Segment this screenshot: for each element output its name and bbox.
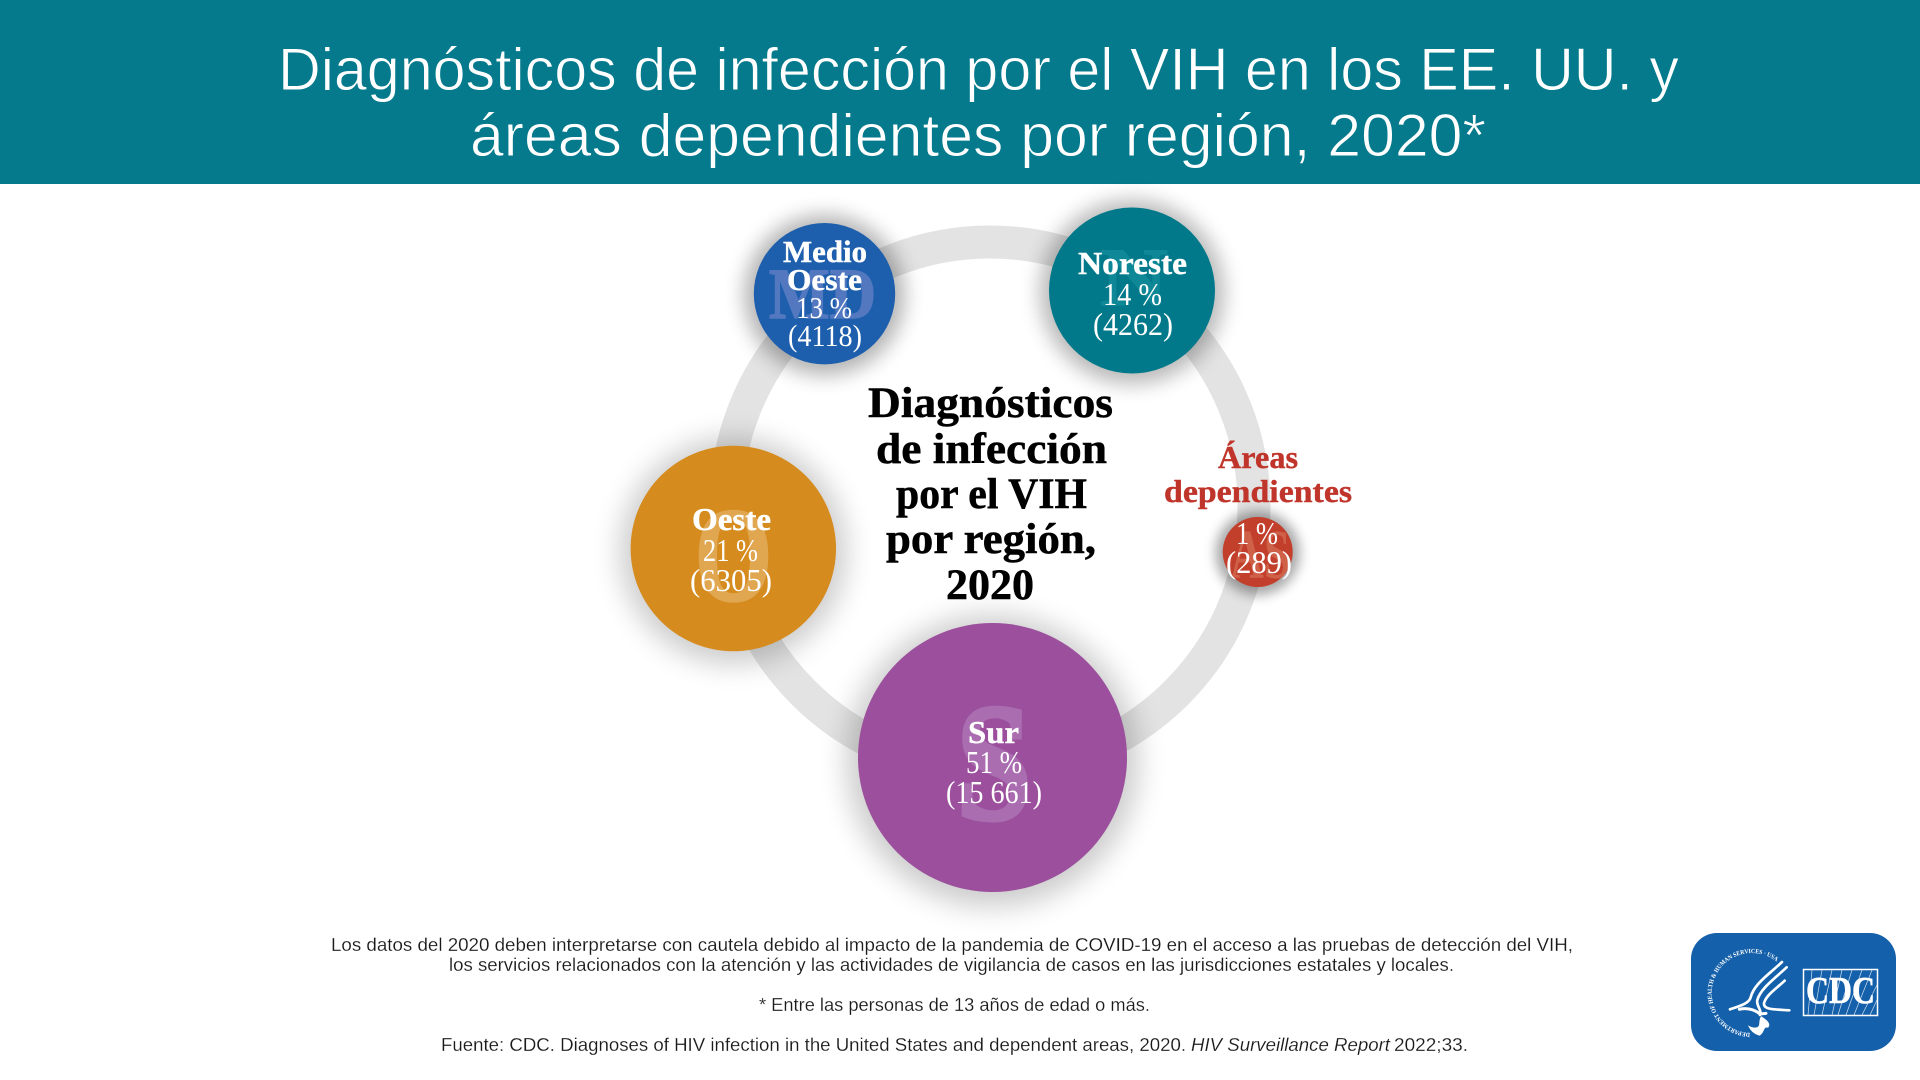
label Medio Oeste: 13 %: [796, 290, 852, 325]
footnotes: Los datos del 2020 deben interpretarse con cautela debido al impacto de la pandemia de COVID-19 en el acceso a las pruebas de detección del VIH,: [331, 935, 1573, 955]
label Oeste: [690, 501, 772, 598]
footnotes: [331, 935, 1573, 1055]
center heading: por región,: [886, 516, 1096, 563]
region: Sur: [846, 615, 1138, 907]
value 1 % (289): [1226, 515, 1292, 580]
ghost letter S: S: [956, 670, 1032, 856]
title: [278, 36, 1679, 169]
footnotes: Fuente: CDC. Diagnoses of HIV infection in the United States and dependent areas, 2020.: [441, 1035, 1186, 1055]
ghost letter O: O: [695, 481, 772, 629]
label Medio Oeste: Oeste: [787, 262, 862, 297]
label Oeste: Oeste: [692, 501, 771, 537]
center heading: de infección: [876, 426, 1107, 473]
label Noreste: Noreste: [1078, 245, 1187, 281]
label Sur: [946, 714, 1042, 810]
label Noreste: (4262): [1093, 306, 1173, 342]
value 1 % (289): (289): [1226, 544, 1292, 580]
region: Noreste: [1040, 200, 1224, 384]
CDC box: CDC: [1806, 970, 1875, 1012]
label Sur: Sur: [968, 714, 1019, 750]
footnotes: los servicios relacionados con la atención y las actividades de vigilancia de casos en las jurisdicciones estatales y locales.: [449, 955, 1454, 975]
ghost letters MD: MD: [769, 254, 876, 334]
center heading: por el VIH: [896, 471, 1087, 518]
center heading: 2020: [946, 562, 1034, 609]
label Áreas dependientes: Áreas: [1218, 439, 1298, 475]
center heading: Diagnósticos: [868, 380, 1113, 427]
label Noreste: 14 %: [1103, 276, 1162, 312]
logo: HHS and CDC: [1691, 933, 1896, 1051]
label Medio Oeste: Medio: [783, 234, 867, 269]
header banner: [0, 0, 1920, 184]
label Sur: 51 %: [966, 744, 1022, 780]
center heading: [868, 380, 1113, 609]
region: Áreas dependientes: [1164, 439, 1352, 595]
ring connecting regions: [726, 242, 1254, 770]
footnotes: * Entre las personas de 13 años de edad o más.: [759, 995, 1150, 1015]
footnotes: HIV Surveillance Report: [1191, 1035, 1391, 1055]
title: áreas dependientes por región, 2020*: [470, 102, 1486, 169]
ghost letters AS: AS: [1230, 517, 1290, 594]
ghost letter N: N: [1100, 231, 1168, 323]
region: Medio Oeste: [744, 215, 904, 375]
HHS seal text: DEPARTMENT OF HEALTH & HUMAN SERVICES · USA: [1708, 948, 1778, 1038]
label Áreas dependientes: dependientes: [1164, 473, 1352, 509]
label Medio Oeste: [783, 234, 867, 353]
label Oeste: (6305): [690, 562, 772, 598]
region: Oeste: [620, 438, 846, 664]
label Oeste: 21 %: [703, 532, 758, 568]
title: Diagnósticos de infección por el VIH en los EE. UU. y: [278, 36, 1679, 103]
icon: HHS eagle: [1730, 962, 1789, 1035]
label Noreste: [1078, 245, 1187, 342]
footnotes: 2022;33.: [1394, 1035, 1468, 1055]
value 1 % (289): 1 %: [1236, 515, 1278, 551]
label Sur: (15 661): [946, 774, 1042, 810]
label Medio Oeste: (4118): [788, 318, 862, 353]
label Áreas dependientes: [1164, 439, 1352, 509]
